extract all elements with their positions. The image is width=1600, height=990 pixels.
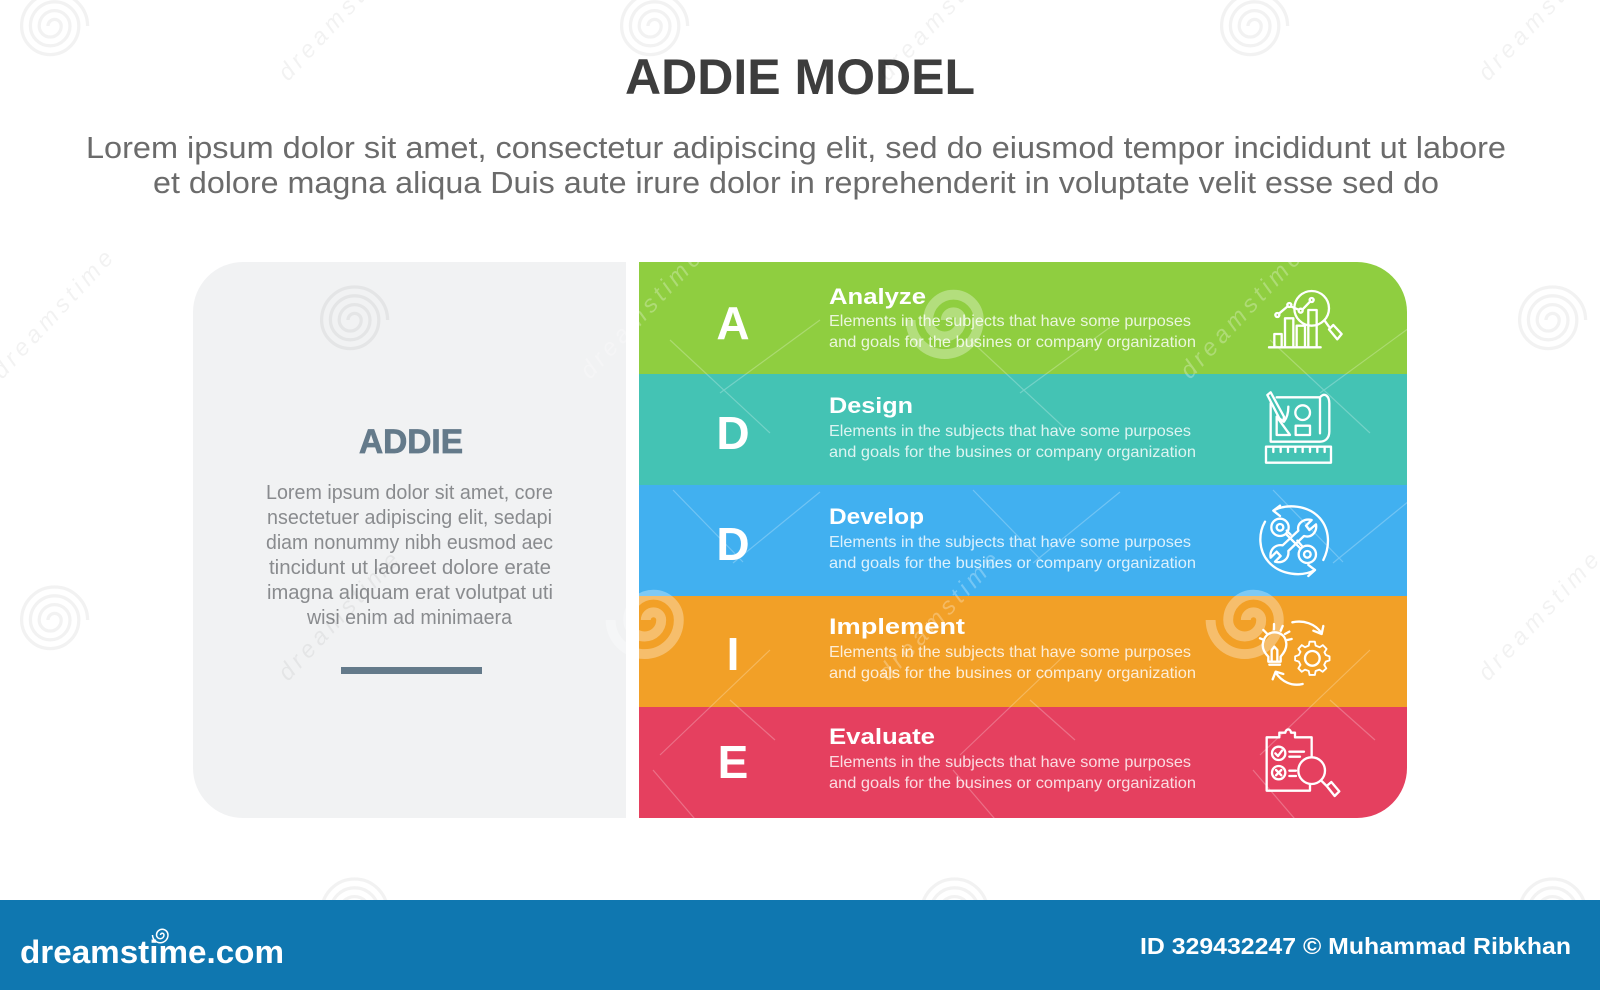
description	[829, 313, 1196, 351]
panel body text: tincidunt ut laoreet dolore erate	[269, 557, 551, 579]
panel body text: imagna aliquam erat volutpat uti	[267, 582, 553, 604]
panel body text: diam nonummy nibh eusmod aec	[266, 532, 553, 554]
letter I: I	[727, 628, 739, 680]
description: Elements in the subjects that have some purposes	[829, 534, 1191, 551]
heading Analyze: Analyze	[829, 284, 926, 309]
description: Elements in the subjects that have some purposes	[829, 754, 1191, 771]
footer logo spiral	[152, 929, 168, 943]
watermark text: dreamstime	[575, 245, 707, 384]
panel body text: Lorem ipsum dolor sit amet, core	[266, 482, 553, 504]
watermark text	[0, 0, 1600, 686]
letter A: A	[716, 297, 750, 349]
letter D: D	[716, 518, 750, 570]
description	[829, 754, 1196, 792]
footer logo text: dreamstime.com	[20, 934, 284, 970]
watermark lines	[653, 320, 1420, 825]
letter D: D	[716, 407, 750, 459]
description: and goals for the busines or company organization	[829, 334, 1196, 351]
icon: chart with magnifier	[1269, 291, 1342, 347]
description: and goals for the busines or company organization	[829, 444, 1196, 461]
panel body text	[266, 482, 553, 629]
heading Develop: Develop	[829, 504, 924, 529]
heading Evaluate: Evaluate	[829, 724, 935, 749]
row: Develop	[639, 485, 1407, 596]
icon: bulb and gear cycle	[1260, 622, 1330, 685]
row: Implement	[639, 596, 1407, 707]
subtitle text: Lorem ipsum dolor sit amet, consectetur adipiscing elit, sed do eiusmod tempor incididunt ut labore	[86, 130, 1506, 165]
panel: ADDIE summary	[193, 262, 626, 818]
footer bar	[0, 900, 1600, 990]
description: Elements in the subjects that have some purposes	[829, 423, 1191, 440]
panel heading: ADDIE	[359, 423, 463, 461]
icon: blueprint and ruler	[1266, 392, 1331, 463]
description: Elements in the subjects that have some purposes	[829, 644, 1191, 661]
description	[829, 423, 1196, 461]
letter E: E	[718, 736, 748, 788]
description: and goals for the busines or company organization	[829, 775, 1196, 792]
subtitle text: et dolore magna aliqua Duis aute irure dolor in reprehenderit in voluptate velit esse sed do	[153, 165, 1439, 200]
row: Analyze	[639, 262, 1407, 374]
panel body text: nsectetuer adipiscing elit, sedapi	[267, 507, 552, 529]
icon: clipboard and magnifier	[1267, 729, 1339, 796]
title: ADDIE MODEL	[625, 49, 975, 105]
description	[829, 644, 1196, 682]
description: Elements in the subjects that have some purposes	[829, 313, 1191, 330]
panel underline bar	[341, 667, 482, 674]
heading Implement: Implement	[829, 614, 966, 639]
description: and goals for the busines or company organization	[829, 665, 1196, 682]
icon: tools in cycle	[1260, 506, 1328, 576]
description	[829, 534, 1196, 572]
watermark text: dreamstime	[873, 547, 1005, 686]
watermark text: dreamstime	[1175, 245, 1307, 384]
heading Design: Design	[829, 393, 913, 418]
row: Evaluate	[639, 707, 1407, 818]
watermark text: dreamstime	[273, 547, 405, 686]
description: and goals for the busines or company organization	[829, 555, 1196, 572]
panel body text: wisi enim ad minimaera	[306, 607, 513, 629]
row: Design	[639, 374, 1407, 485]
footer credit: ID 329432247 © Muhammad Ribkhan	[1140, 933, 1571, 959]
subtitle text	[86, 130, 1506, 200]
